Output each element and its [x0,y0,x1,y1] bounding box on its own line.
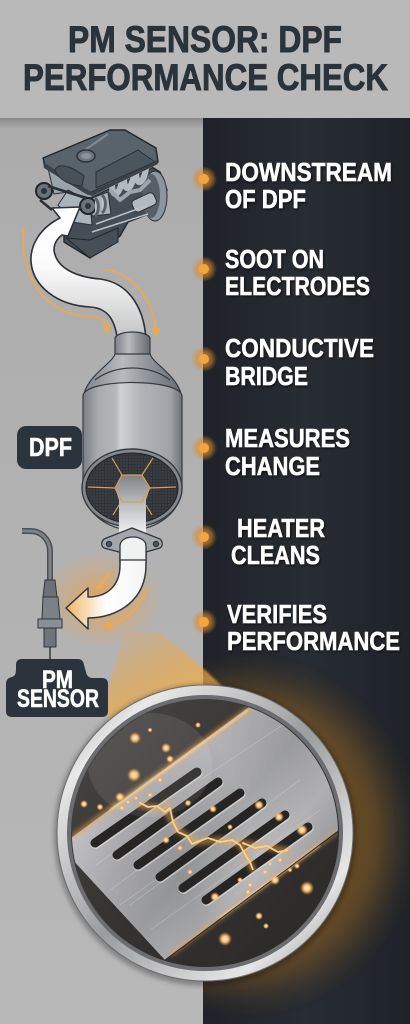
filter honeycomb end [82,449,182,535]
label: DPF [17,426,82,469]
step: downstream of DPF: OF DPF [225,184,306,214]
step: measures change: MEASURES [225,423,350,453]
step: verifies performance: VERIFIES [227,599,327,629]
electrode slots [95,772,309,901]
step: heater cleans [191,513,325,570]
label: PM sensor: SENSOR [17,685,99,713]
step: soot on electrodes [191,244,370,301]
step: downstream of DPF [191,157,392,214]
step: soot on electrodes: SOOT ON [225,244,324,274]
electrode plate [72,708,338,960]
step list [191,157,400,656]
magnified lens: sensor electrodes with soot bridge [54,684,356,986]
title: PM SENSOR: DPF [68,19,342,60]
orange flow arrows upper [23,228,161,338]
label: PM sensor: PM [42,666,73,694]
label: DPF: DPF [29,432,72,462]
step: conductive bridge: BRIDGE [225,361,308,391]
background: light left panel [0,118,203,1024]
icon: flange [102,528,162,560]
conductive soot bridge [140,803,288,870]
step: measures change: CHANGE [225,451,320,481]
step: conductive bridge [191,333,374,391]
header band [0,0,410,129]
icon: engine [36,130,167,258]
step: verifies performance [191,599,400,656]
arrow: exhaust out towards sensor [40,548,164,648]
icon: DPF canister [82,332,182,535]
step: heater cleans: HEATER [237,513,325,543]
icon: PM sensor probe [22,531,62,660]
step: heater cleans: CLEANS [231,540,320,570]
sparks [80,722,314,946]
arrow: white exhaust flow into engine [31,207,146,345]
panel: dark right column [203,118,410,1024]
step: soot on electrodes: ELECTRODES [225,271,370,301]
step: measures change [191,423,350,481]
title [23,19,388,98]
step: conductive bridge: CONDUCTIVE [225,333,374,363]
label: PM sensor [6,659,108,717]
light beam from sensor to lens [108,632,410,1004]
